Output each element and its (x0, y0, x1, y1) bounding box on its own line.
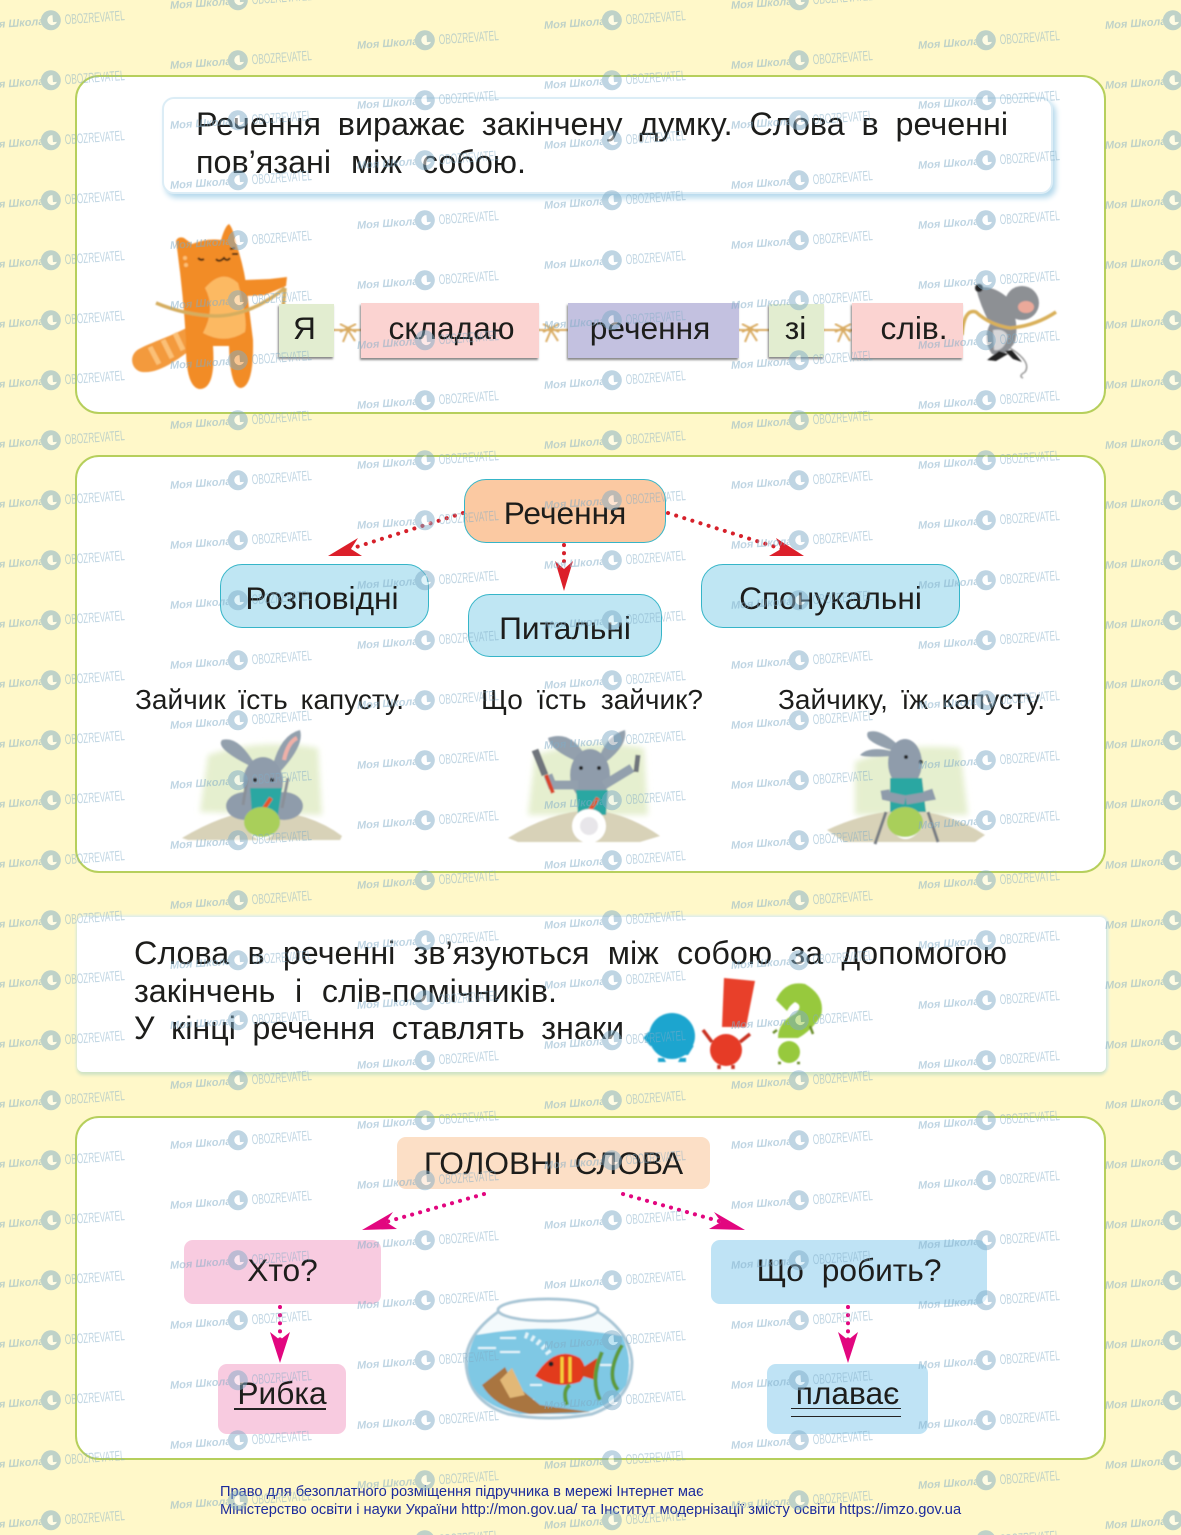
underline: swims predicate (791, 1408, 901, 1417)
icon: knots between word cards (326, 324, 864, 342)
arrow: sentence to narrative (328, 513, 463, 556)
panel: main words (75, 1116, 1106, 1460)
node: question (468, 594, 662, 657)
icon: bunny with empty plate (508, 730, 660, 843)
icon: orange cat (132, 224, 287, 389)
panel: word connection rule (77, 917, 1106, 1072)
text block: word connection rule: У кінці речення ставлять знаки (134, 1010, 624, 1046)
footer: copyright note: Право для безоплатного розміщення підручника в мережі Інтернет має (220, 1484, 704, 1500)
arrow: main words to who (362, 1194, 484, 1230)
arrow: what does to swims (838, 1307, 858, 1363)
word card: Я (279, 304, 334, 357)
footer: copyright note (220, 1484, 962, 1518)
node: who: Хто? (247, 1252, 318, 1288)
word card: речення: речення (590, 310, 710, 346)
word card: слів (852, 303, 963, 358)
text block: word connection rule: Слова в реченні зв’язуються між собою за допомогою (134, 935, 1007, 971)
arrow: who to fish (270, 1307, 290, 1363)
word card: зі (769, 304, 824, 357)
arrow: sentence to question (555, 545, 573, 591)
node: imperative: Спонукальні (739, 580, 922, 616)
node: who (184, 1240, 381, 1304)
example: imperative sentence: Зайчику, їж капусту. (778, 684, 1045, 715)
node: sentence (464, 479, 666, 543)
word card: складаю (361, 303, 539, 358)
arrow: sentence to imperative (668, 513, 804, 556)
text block: definition: Речення виражає закінчену думку. Слова в реченні (196, 106, 1008, 142)
icon: bunny with cabbage (182, 730, 342, 840)
icon: punctuation characters (646, 978, 822, 1069)
text block: word connection rule: закінчень і слів-помічників. (134, 973, 557, 1009)
underline: fish subject (234, 1408, 326, 1410)
arrow: main words to what does (623, 1194, 745, 1230)
word card: речення (568, 303, 739, 358)
node: fish: Рибка (237, 1374, 327, 1410)
text block: word connection rule (134, 935, 1007, 1046)
node: narrative: Розповідні (245, 580, 399, 616)
footer: copyright note: Міністерство освіти і науки України http://mon.gov.ua/ та Інститут модернізації змісту освіти https://imzo.gov.ua (220, 1502, 961, 1518)
panel: sentence definition (75, 75, 1106, 414)
callout: definition box (162, 97, 1053, 194)
node: swims: плаває (796, 1374, 899, 1410)
node: question: Питальні (499, 610, 631, 646)
node: fish (218, 1364, 346, 1434)
word card: зі: зі (785, 310, 806, 346)
example: question sentence: Що їсть зайчик? (481, 684, 703, 715)
node: swims (767, 1364, 928, 1434)
node: sentence: Речення (504, 495, 626, 531)
heading: main words: ГОЛОВНІ СЛОВА (424, 1144, 683, 1180)
word card: слів: слів. (880, 310, 948, 346)
node: what does (711, 1240, 987, 1304)
node: imperative (701, 564, 960, 628)
icon: fish bowl (466, 1299, 632, 1418)
text block: definition (196, 106, 1008, 180)
word card: складаю: складаю (388, 310, 515, 346)
panel: sentence types (75, 455, 1106, 873)
icon: grey mouse (962, 284, 1056, 378)
word card: Я: Я (293, 310, 316, 346)
node: narrative (220, 564, 429, 628)
heading: main words (397, 1137, 710, 1189)
icon: bunny with cutlery and cabbage (827, 731, 985, 844)
example: narrative sentence: Зайчик їсть капусту. (135, 684, 404, 715)
node: what does: Що робить? (757, 1252, 941, 1288)
text block: definition: пов’язані між собою. (196, 144, 526, 180)
